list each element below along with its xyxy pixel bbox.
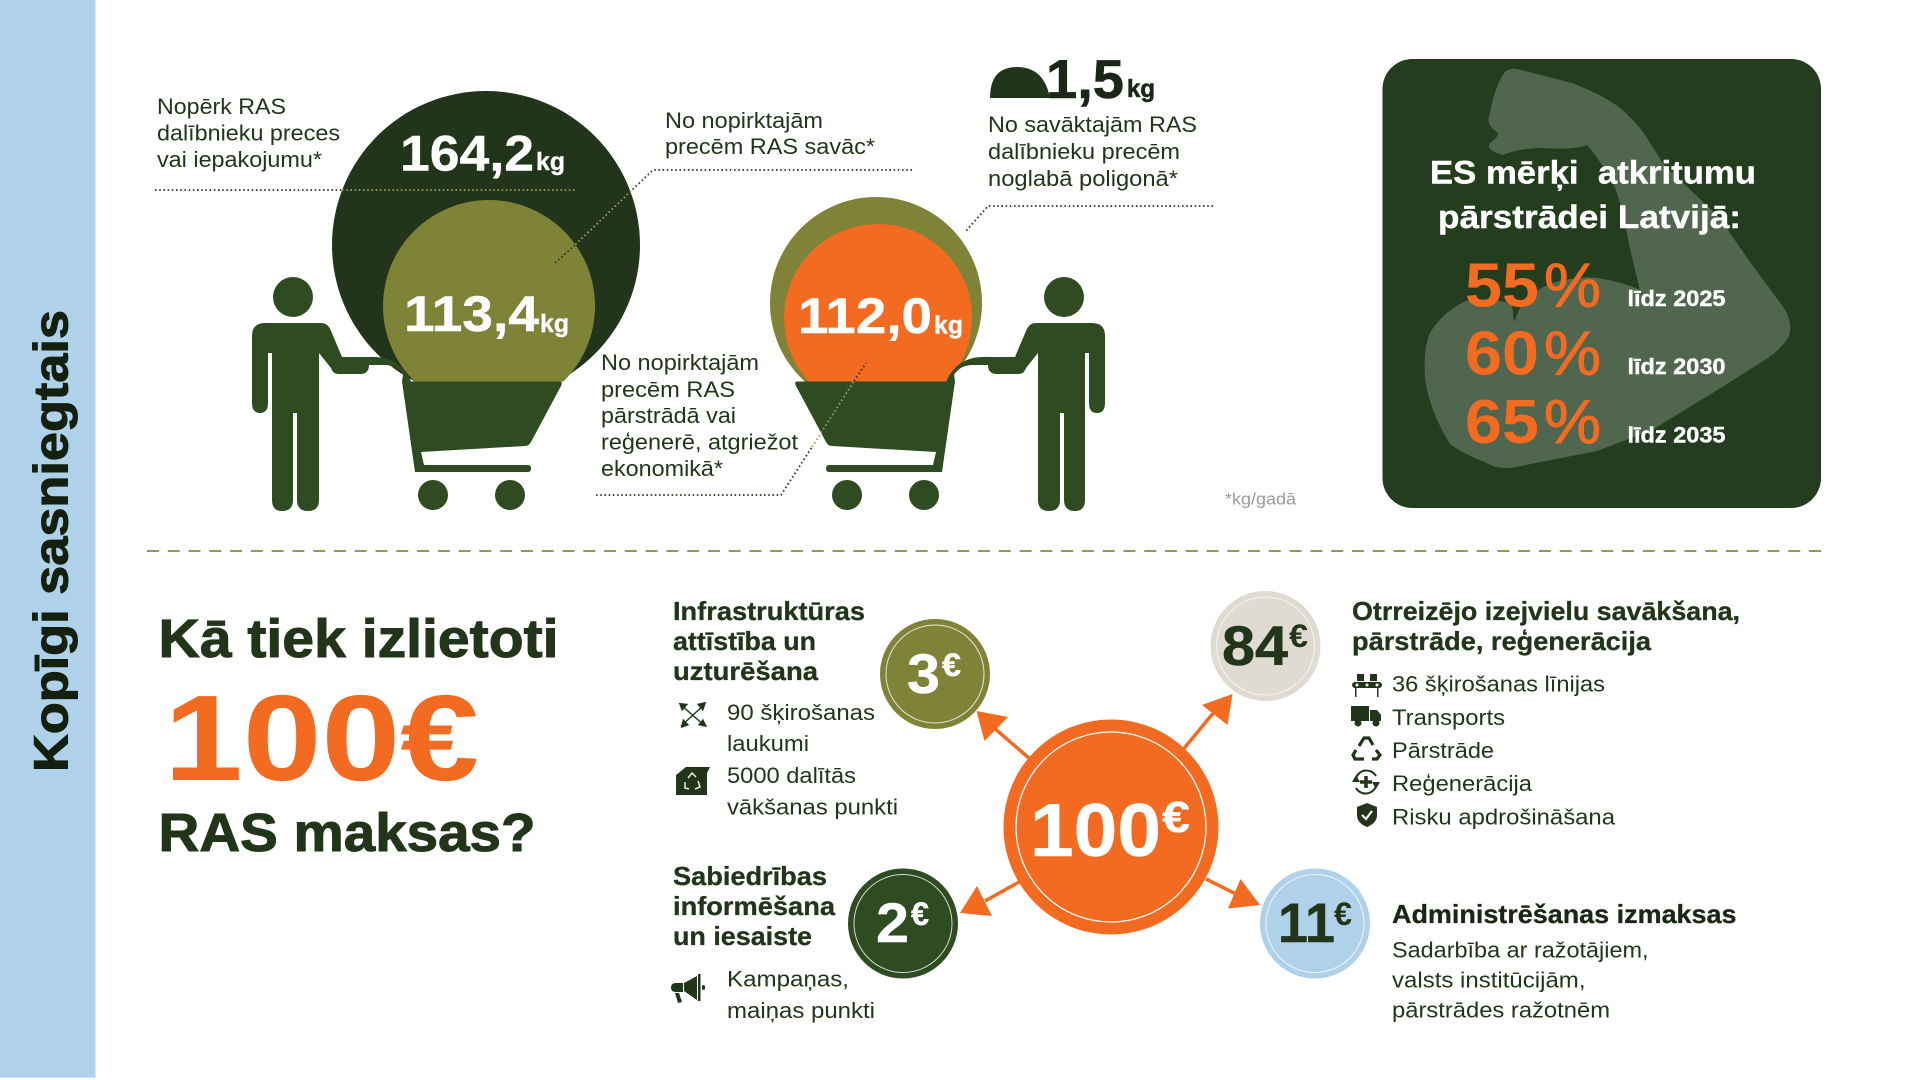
text block: public information: Kampaņas, xyxy=(727,966,849,992)
text block: administration: Sadarbība ar ražotājiem, xyxy=(1392,938,1648,962)
target 60% xyxy=(1465,320,1726,388)
label: landfill: dalībnieku precēm xyxy=(988,139,1180,164)
person with cart right xyxy=(795,277,1105,511)
heading: how 100 EUR is spent: 100€ xyxy=(164,670,479,806)
circle: 2 EUR xyxy=(848,868,958,978)
text block: public information xyxy=(673,861,875,1023)
icon: recycle xyxy=(1353,738,1380,759)
text block: collection and recycling: 36 šķirošanas līnijas xyxy=(1392,672,1605,696)
circle: 100 EUR centre: € xyxy=(1162,793,1190,842)
panel title xyxy=(1430,154,1756,235)
value: 113,4 kg: kg xyxy=(540,310,569,338)
text block: public information: Sabiedrības xyxy=(673,861,827,891)
icon: shield xyxy=(1357,803,1377,827)
label: landfill: No savāktajām RAS xyxy=(988,112,1197,137)
value: 164,2 kg: 164,2 xyxy=(400,126,534,182)
text block: administration: valsts institūcijām, xyxy=(1392,968,1586,992)
text block: collection and recycling: Risku apdrošināšana xyxy=(1392,804,1616,830)
text block: administration: pārstrādes ražotnēm xyxy=(1392,998,1610,1022)
icon: megaphone xyxy=(671,974,705,1003)
text block: collection and recycling: Pārstrāde xyxy=(1392,738,1494,763)
text block: infrastructure xyxy=(673,596,898,820)
text block: public information: maiņas punkti xyxy=(727,998,875,1023)
target 55%: līdz 2025 xyxy=(1628,286,1726,311)
target 65%: līdz 2035 xyxy=(1628,422,1726,448)
heading: how 100 EUR is spent: Kā tiek izlietoti xyxy=(158,609,558,669)
label: recycled: pārstrādā vai xyxy=(601,403,736,428)
circle: 3 EUR: 3 xyxy=(907,642,940,705)
value: 113,4 kg: 113,4 xyxy=(404,286,539,342)
label: purchased xyxy=(157,94,340,172)
label: collected xyxy=(665,108,875,159)
left bubbles: purchased and collected xyxy=(332,91,640,412)
label: recycled: ekonomikā* xyxy=(601,456,723,481)
text block: collection and recycling: pārstrāde, reģenerācija xyxy=(1352,626,1652,656)
icon: landfill mound xyxy=(990,67,1050,98)
text block: administration xyxy=(1392,899,1736,1022)
text block: public information: informēšana xyxy=(673,891,836,921)
text block: collection and recycling: Transports xyxy=(1392,705,1505,730)
right bubbles: collected and recycled xyxy=(770,197,982,382)
label: recycled: reģenerē, atgriežot xyxy=(601,430,798,454)
label: purchased: dalībnieku preces xyxy=(157,120,340,146)
icon: truck xyxy=(1351,706,1381,726)
circle: 100 EUR centre xyxy=(1004,720,1218,934)
target 55%: 55 xyxy=(1465,252,1539,320)
sidebar xyxy=(0,0,96,1078)
label: landfill: noglabā poligonā* xyxy=(988,166,1178,191)
circle: 11 EUR xyxy=(1260,868,1370,978)
circle: 3 EUR xyxy=(880,619,990,729)
text block: collection and recycling: Otrreizējo izejvielu savākšana, xyxy=(1352,596,1740,626)
label: collected: precēm RAS savāc* xyxy=(665,134,875,159)
panel: EU targets xyxy=(1382,59,1821,508)
circle: 11 EUR: € xyxy=(1334,896,1352,932)
circle: 84 EUR xyxy=(1210,591,1320,701)
text block: infrastructure: Infrastruktūras xyxy=(673,596,865,626)
text block: collection and recycling xyxy=(1352,596,1740,830)
text block: infrastructure: uzturēšana xyxy=(673,656,819,686)
circle: 3 EUR: € xyxy=(942,647,961,683)
heading: how 100 EUR is spent xyxy=(158,609,558,863)
footnote: *kg/gadā xyxy=(1225,490,1297,508)
value: 112,0 kg: kg xyxy=(934,312,963,340)
label: purchased: vai iepakojumu* xyxy=(157,147,322,172)
panel title: pārstrādei Latvijā: xyxy=(1438,199,1741,235)
text block: infrastructure: 5000 dalītās xyxy=(727,763,856,788)
sidebar: Kopīgi sasniegtais xyxy=(26,310,78,772)
target 55%: % xyxy=(1544,252,1601,320)
label: recycled: No nopirktajām xyxy=(601,350,759,375)
text block: infrastructure: laukumi xyxy=(727,731,809,756)
text block: infrastructure: attīstība un xyxy=(673,626,816,656)
icon: flexed arm xyxy=(1425,69,1790,468)
text block: collection and recycling: Reģenerācija xyxy=(1392,771,1533,796)
text block: infrastructure: 90 šķirošanas xyxy=(727,700,875,725)
label: landfill xyxy=(988,112,1197,191)
person with cart left xyxy=(252,277,562,511)
text block: administration: Administrēšanas izmaksas xyxy=(1392,899,1736,929)
value: 1,5 kg: 1,5 xyxy=(1046,48,1124,110)
target 65% xyxy=(1465,388,1726,457)
target 60%: 60 xyxy=(1465,320,1539,388)
icon: recycling bin xyxy=(676,767,710,795)
panel title: ES mērķi atkritumu xyxy=(1430,154,1756,190)
value: 1,5 kg: kg xyxy=(1127,75,1155,103)
arrows from centre xyxy=(960,694,1260,916)
icon: regeneration xyxy=(1352,770,1380,794)
circle: 100 EUR centre: 100 xyxy=(1030,788,1161,872)
target 60%: līdz 2030 xyxy=(1628,354,1726,379)
target 65%: 65 xyxy=(1465,388,1539,457)
label: recycled xyxy=(601,350,798,481)
target 55% xyxy=(1465,252,1726,320)
label: recycled: precēm RAS xyxy=(601,377,735,402)
dotted leader lines xyxy=(155,170,1213,495)
icon: crossed arrows xyxy=(679,702,707,728)
circle: 84 EUR: € xyxy=(1289,618,1308,654)
circle: 2 EUR: € xyxy=(911,896,929,932)
circle: 11 EUR: 11 xyxy=(1278,891,1335,954)
value: 112,0 kg: 112,0 xyxy=(798,288,932,344)
target 65%: % xyxy=(1544,388,1601,457)
value: 164,2 kg: kg xyxy=(536,148,565,176)
circle: 2 EUR: 2 xyxy=(876,891,909,954)
label: purchased: Nopērk RAS xyxy=(157,94,286,119)
text block: infrastructure: vākšanas punkti xyxy=(727,794,898,820)
circle: 84 EUR: 84 xyxy=(1222,614,1288,677)
heading: how 100 EUR is spent: RAS maksas? xyxy=(158,803,536,863)
label: collected: No nopirktajām xyxy=(665,108,823,133)
target 60%: % xyxy=(1544,320,1601,388)
icon: conveyor xyxy=(1352,674,1382,697)
text block: public information: un iesaiste xyxy=(673,921,812,951)
